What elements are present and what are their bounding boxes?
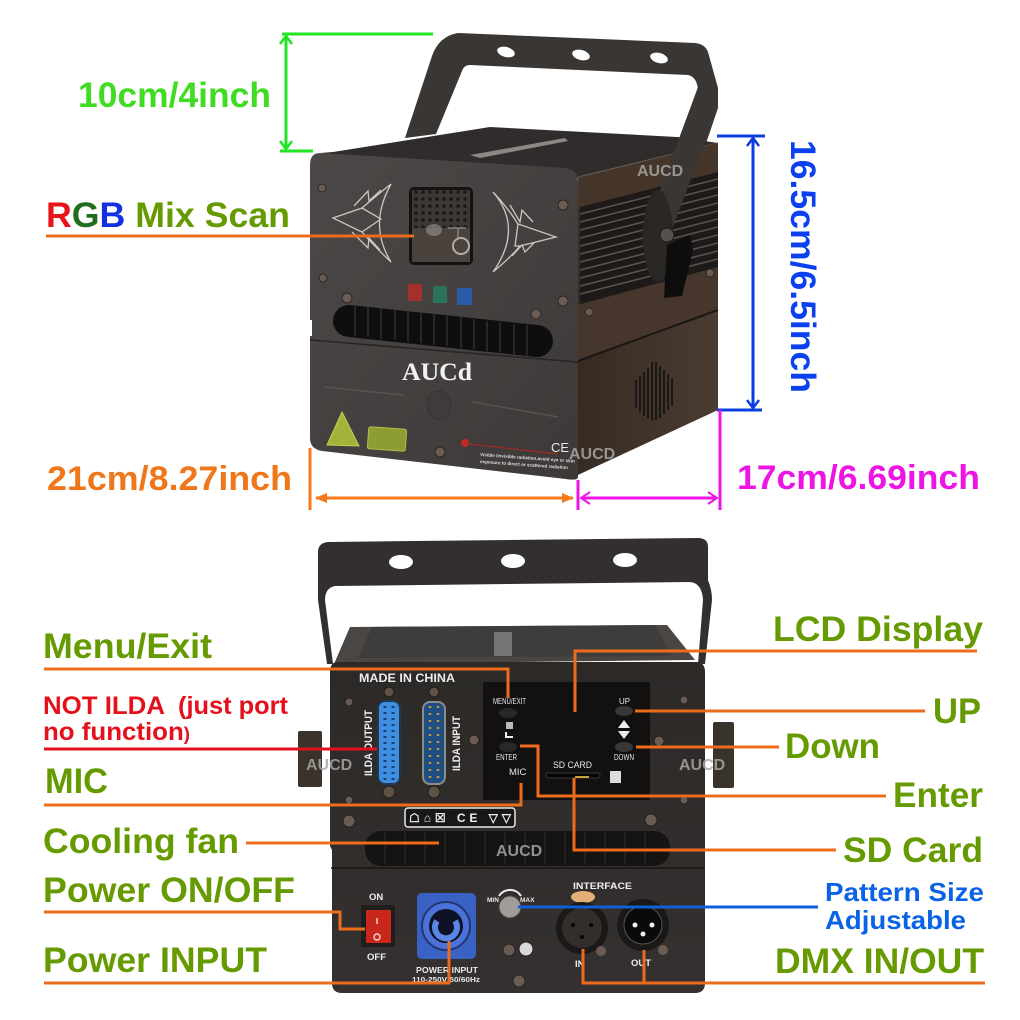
dimension: depth 17cm, magenta: 17cm/6.69inch <box>737 459 980 497</box>
callout: SD Card <box>574 778 983 870</box>
power input connector <box>412 893 480 984</box>
dimension: height 16.5cm, blue <box>717 136 822 410</box>
power input connector: POWER INPUT <box>416 965 479 975</box>
wing logo, right <box>493 192 556 272</box>
down button <box>614 742 634 762</box>
rear cooling vent <box>365 831 670 866</box>
caution text: Visible /invisible radiation,avoid eye or skin <box>480 452 575 464</box>
down button: DOWN <box>614 753 634 762</box>
power switch: OFF <box>367 952 386 963</box>
side knobs <box>298 722 734 788</box>
dimension: height of bracket, green: 10cm/4inch <box>78 76 271 115</box>
rear top surface <box>334 625 695 664</box>
ILDA output port: ILDA OUTPUT <box>363 710 375 776</box>
power switch <box>361 892 395 963</box>
callout: RGB mix scan: RGB Mix Scan <box>46 196 290 235</box>
callout: Cooling fan: Cooling fan <box>43 822 239 861</box>
watermarks <box>569 163 683 463</box>
callout: Down: Down <box>785 727 880 766</box>
callout: Menu/Exit <box>43 627 508 698</box>
callout: NOT ILDA warning: NOT ILDA <box>43 692 165 720</box>
wing logo, left <box>333 184 391 262</box>
callout: Enter <box>520 746 983 815</box>
callout: Power ON/OFF: Power ON/OFF <box>43 871 295 910</box>
compliance symbols plate <box>405 808 515 827</box>
rear watermarks: AUCD <box>306 757 352 774</box>
callout: NOT ILDA warning: (just port <box>178 692 289 720</box>
screws <box>318 184 714 457</box>
callout: LCD Display: LCD Display <box>773 610 984 649</box>
DMX connectors: OUT <box>631 958 651 969</box>
enter button: ENTER <box>496 753 517 762</box>
DMX connectors: IN <box>575 959 585 970</box>
power switch: ON <box>369 892 383 903</box>
callout: UP: UP <box>933 692 981 731</box>
ILDA output port <box>363 687 400 798</box>
callout: Pattern Size Adjustable: Adjustable <box>825 905 966 935</box>
brand logo: AUCd <box>402 359 472 386</box>
rear panel <box>330 662 705 993</box>
callout: Power ON/OFF <box>43 871 365 929</box>
ILDA input port: ILDA INPUT <box>451 716 463 771</box>
laser warning triangle <box>327 412 359 446</box>
enter button <box>496 742 517 762</box>
caution text <box>461 439 575 470</box>
dimension: depth 17cm, magenta <box>578 410 980 510</box>
callout: LCD Display <box>575 610 984 712</box>
watermarks: AUCD <box>569 446 615 463</box>
callout: Pattern Size Adjustable: Pattern Size <box>825 877 984 907</box>
dimension: width 21cm, orange <box>47 448 574 510</box>
callout: Menu/Exit: Menu/Exit <box>43 627 212 666</box>
laser output window <box>409 187 473 265</box>
rear bracket <box>318 538 712 664</box>
callout: DMX IN/OUT: DMX IN/OUT <box>775 942 984 981</box>
dimension: width 21cm, orange: 21cm/8.27inch <box>47 460 292 498</box>
front-view laser unit photo <box>308 33 718 480</box>
dimension: height 16.5cm, blue: 16.5cm/6.5inch <box>783 140 822 393</box>
housing top <box>320 127 718 178</box>
rear-view laser unit photo: MADE IN CHINA <box>359 673 455 685</box>
sd card slot: SD CARD <box>553 760 592 771</box>
housing right side <box>567 143 718 480</box>
callout: NOT ILDA warning <box>43 692 377 749</box>
callout: SD Card: SD Card <box>843 831 983 870</box>
DMX connectors: INTERFACE <box>573 881 632 892</box>
front cooling vent <box>349 306 537 355</box>
front panel slots <box>325 387 558 417</box>
ILDA input port <box>423 687 463 798</box>
rear cooling vent: AUCD <box>496 843 542 860</box>
up button: UP <box>619 697 630 706</box>
pattern size knob <box>487 890 535 918</box>
mounting bracket, front view <box>405 33 718 220</box>
pattern size knob: MIN <box>487 897 499 904</box>
menu exit button <box>493 697 526 718</box>
control display panel <box>483 682 650 800</box>
power input connector: 110-250V 50/60Hz <box>412 975 480 984</box>
rear watermarks: AUCD <box>679 757 725 774</box>
compliance symbols plate: ☖⌂☒ CE ▽▽ <box>409 811 512 825</box>
callout: DMX IN/OUT <box>583 942 985 983</box>
callout: Power INPUT <box>43 941 449 983</box>
callout: MIC <box>44 762 521 805</box>
callout: NOT ILDA warning: no function ) <box>43 718 190 746</box>
callout: MIC: MIC <box>45 762 108 801</box>
watermarks: AUCD <box>637 163 683 180</box>
side heat-sink fins <box>580 172 718 304</box>
sd card slot <box>546 760 600 778</box>
warning plate <box>367 427 407 451</box>
ground screws <box>343 696 688 987</box>
pattern size knob: MAX <box>520 897 535 904</box>
callout: Enter: Enter <box>893 776 983 815</box>
rear-view laser unit photo <box>298 538 734 993</box>
dimension: height of bracket, green <box>78 34 433 151</box>
callout: Pattern Size Adjustable <box>518 877 984 935</box>
mic label: MIC <box>509 767 527 778</box>
side speaker grille <box>636 362 672 420</box>
RGB indicator squares <box>408 284 472 305</box>
handle arm and tightening knob <box>643 87 718 298</box>
housing front face <box>310 153 578 480</box>
caution text: CE <box>551 440 569 455</box>
rear watermarks <box>306 757 725 774</box>
caution text: exposure to direct or scattered radiation <box>480 459 568 470</box>
menu exit button: MENU/EXIT <box>493 697 526 706</box>
callout: Power INPUT: Power INPUT <box>43 941 267 980</box>
up button <box>615 697 633 716</box>
DMX connectors <box>556 881 669 970</box>
